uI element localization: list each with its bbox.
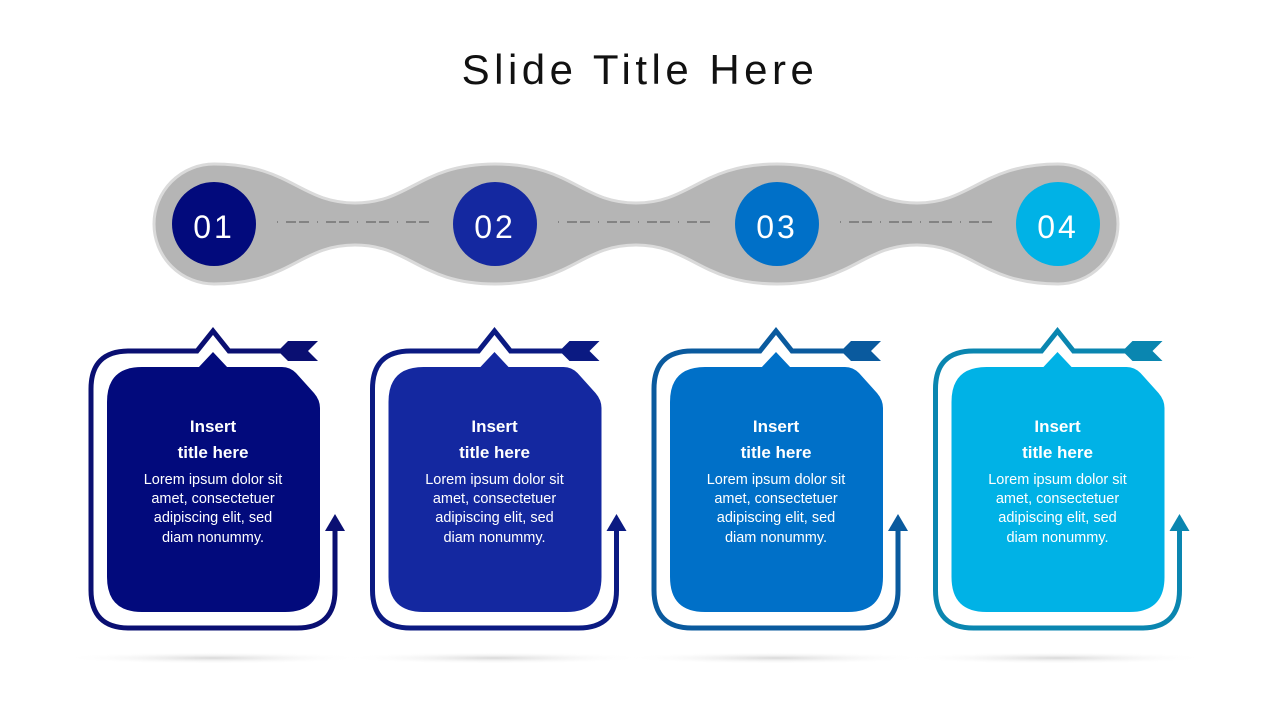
- card 1: Lorem ipsum dolor sit: [144, 472, 282, 488]
- card 4: adipiscing elit, sed: [998, 510, 1117, 526]
- card 2: amet, consectetuer: [433, 491, 556, 507]
- card 3: amet, consectetuer: [714, 491, 838, 507]
- step 04 circle: [1016, 182, 1100, 266]
- card 1: adipiscing elit, sed: [154, 510, 272, 526]
- title: Slide Title Here: [462, 46, 818, 93]
- card 3: Lorem ipsum dolor sit: [707, 472, 845, 488]
- card 1: amet, consectetuer: [151, 491, 275, 507]
- step 02 circle: [453, 182, 537, 266]
- card 2: diam nonummy.: [443, 530, 546, 546]
- card 1: [63, 331, 363, 664]
- card 1: diam nonummy.: [162, 530, 264, 546]
- card 3: adipiscing elit, sed: [717, 510, 835, 526]
- card 2: title here: [459, 443, 530, 462]
- card 3: title here: [741, 443, 811, 462]
- card 4: Insert: [1034, 417, 1081, 436]
- card 2: Insert: [471, 417, 518, 436]
- card 1: Insert: [190, 417, 236, 436]
- step 01 circle: 01: [193, 209, 235, 245]
- card 4: Lorem ipsum dolor sit: [988, 472, 1127, 488]
- card 4: amet, consectetuer: [996, 491, 1119, 507]
- card 2: Lorem ipsum dolor sit: [425, 472, 564, 488]
- card 3: diam nonummy.: [725, 530, 827, 546]
- card 4: diam nonummy.: [1006, 530, 1109, 546]
- card 3: [626, 331, 926, 664]
- step 04 circle: 04: [1037, 209, 1079, 245]
- card 2: [344, 331, 644, 664]
- card 2: adipiscing elit, sed: [435, 510, 554, 526]
- card 4: [908, 331, 1208, 664]
- step 03 circle: 03: [756, 209, 798, 245]
- step 03 circle: [735, 182, 819, 266]
- step 01 circle: [172, 182, 256, 266]
- card 1: title here: [178, 443, 248, 462]
- card 4: title here: [1022, 443, 1093, 462]
- timeline band: [154, 164, 1118, 284]
- card 3: Insert: [753, 417, 799, 436]
- step 02 circle: 02: [474, 209, 516, 245]
